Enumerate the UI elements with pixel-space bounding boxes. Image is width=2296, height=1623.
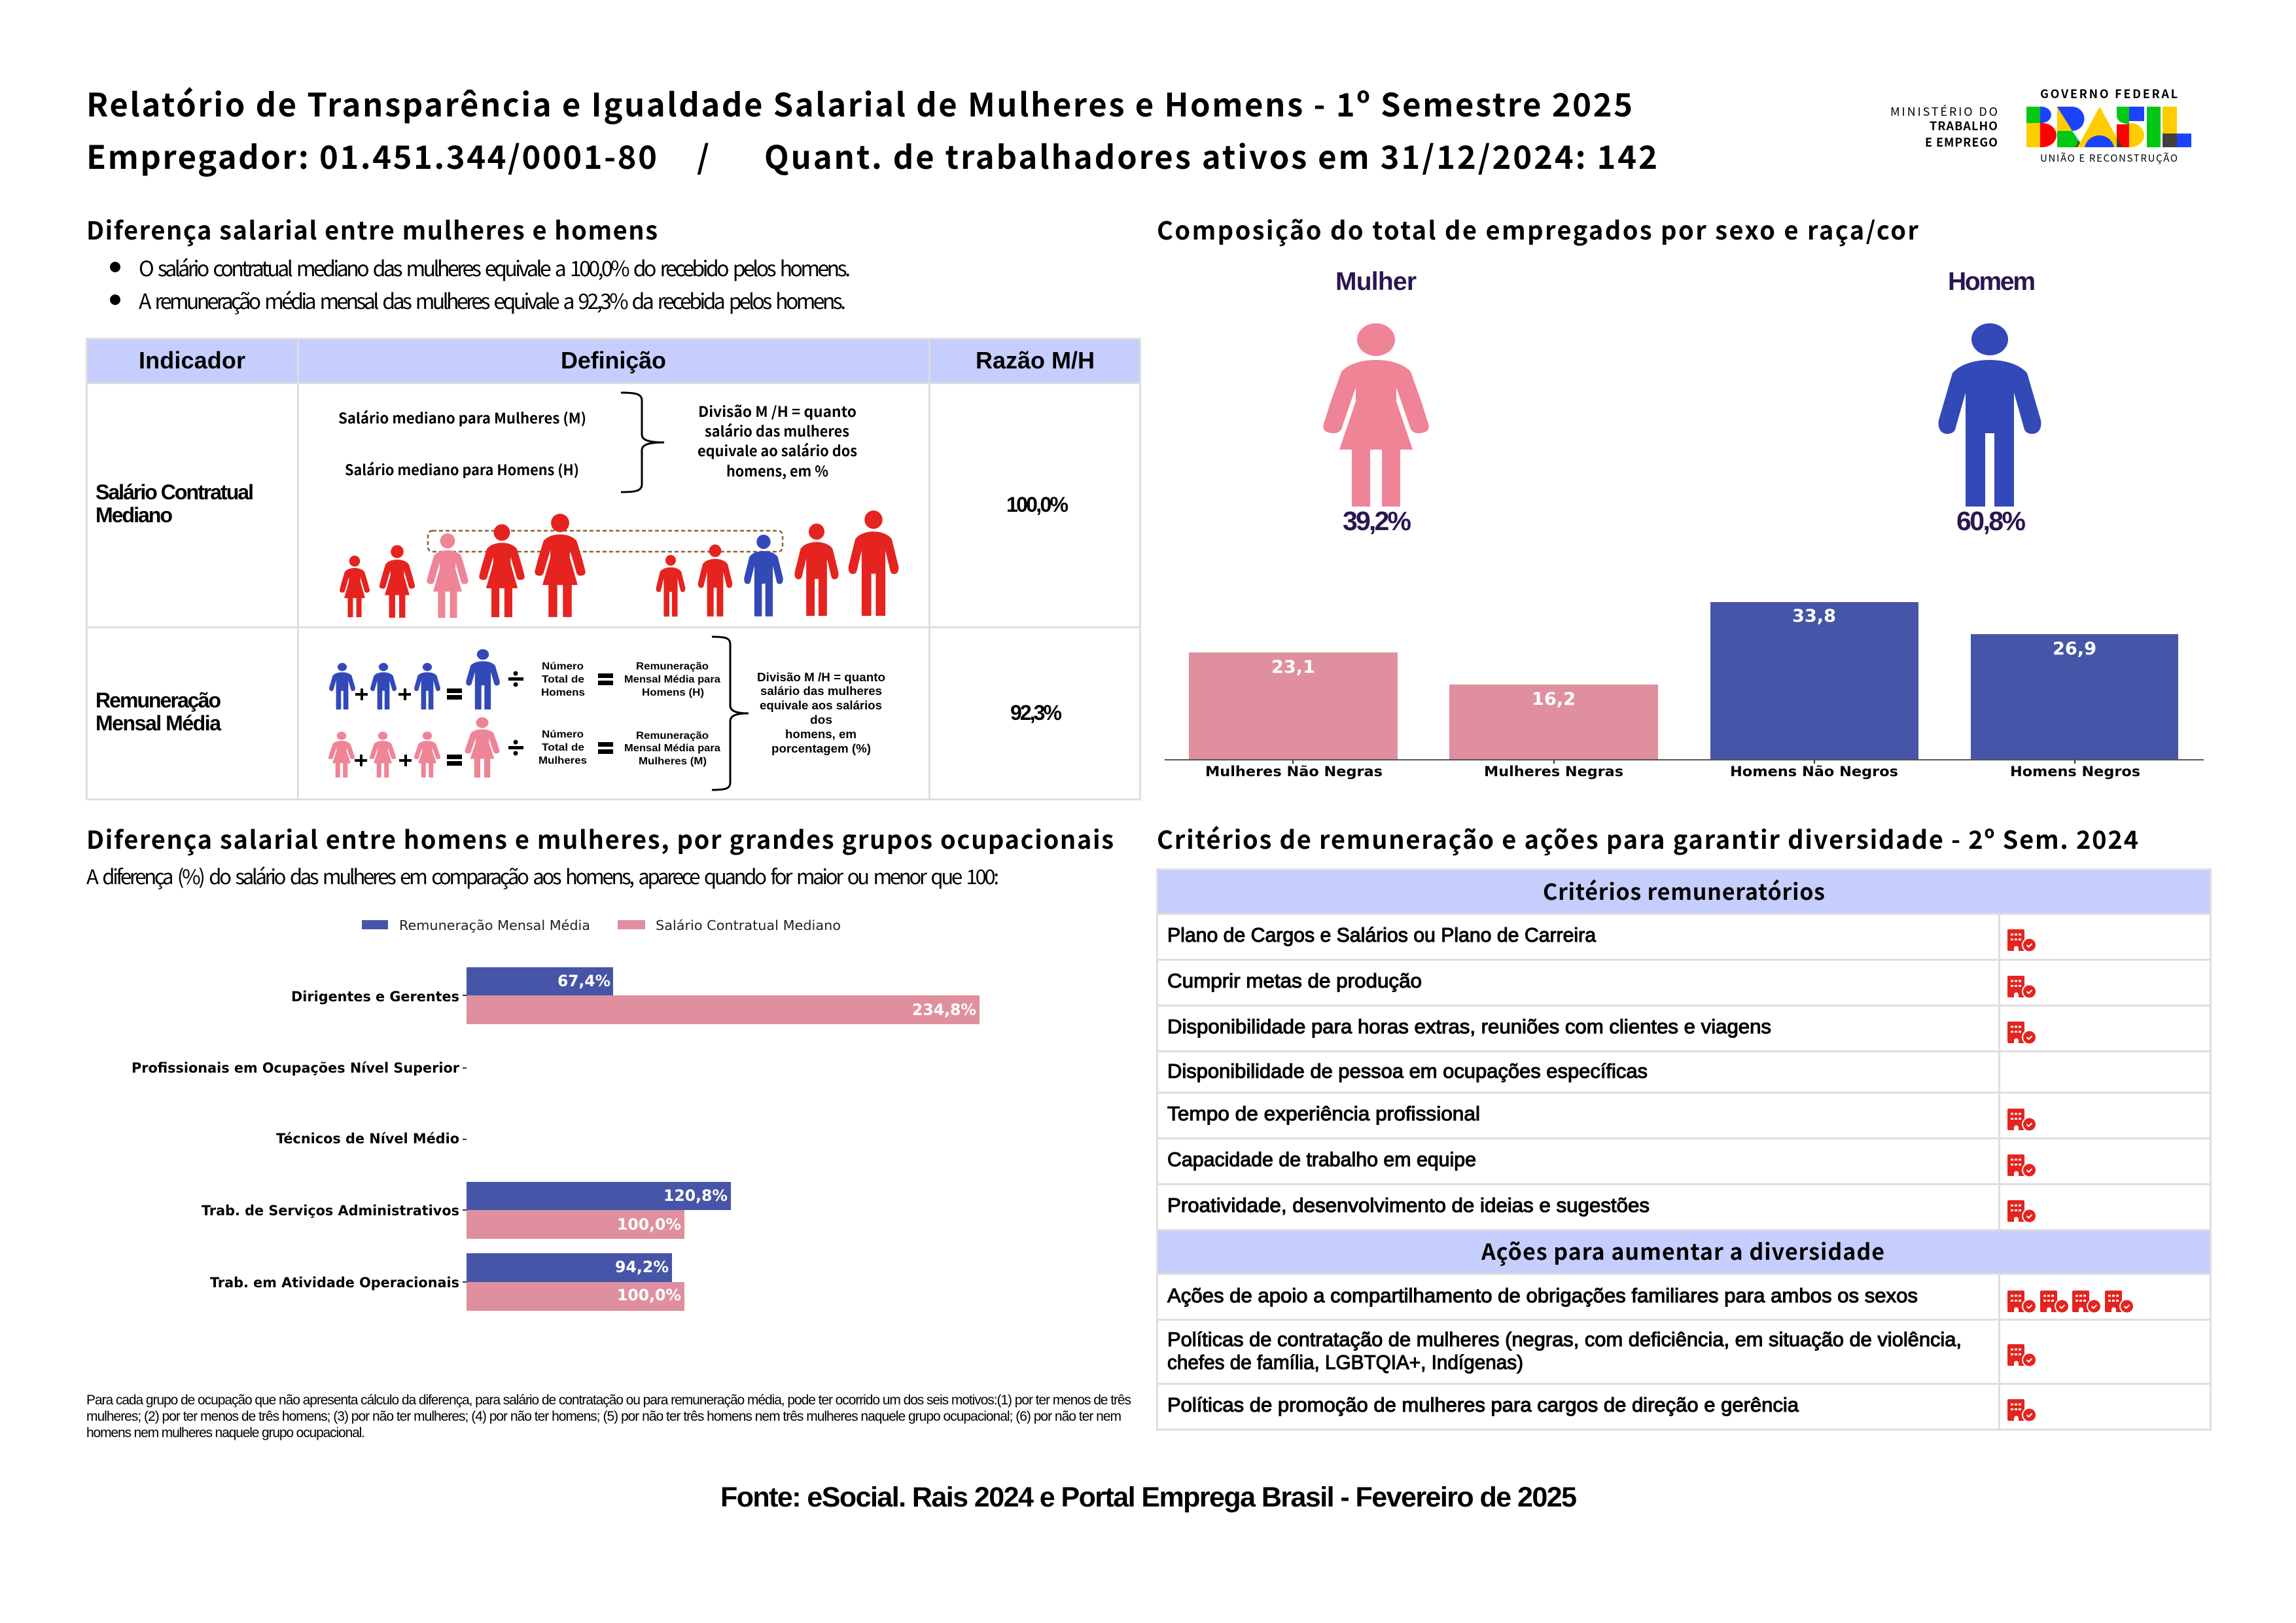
formula text: homens: Homens (541, 687, 585, 698)
formula text: salário mediano: Salário mediano para Mulheres (M) (338, 407, 586, 428)
formula text: mulheres: Remuneração (636, 730, 709, 741)
row text: critérios: Plano de Cargos e Salários ou Plano de Carreira (1167, 923, 1597, 946)
source footer: Fonte: eSocial. Rais 2024 e Portal Emprega Brasil - Fevereiro de 2025 (720, 1482, 1577, 1513)
bars: Trab. de Serviços Administrativos: 100,0% (617, 1215, 681, 1234)
bars: Trab. em Atividade Operacionais: 100,0% (617, 1286, 681, 1304)
category labels (1205, 764, 2140, 779)
explanation text: divisão M/H: salário das mulheres (760, 685, 882, 698)
formula text: mulheres: Mulheres (M) (639, 756, 707, 767)
bars: Dirigentes e Gerentes: 67,4% (557, 972, 610, 990)
explanation text: divisão M/H: equivale ao salário dos (698, 440, 857, 461)
row label: Remuneração Mensal Média (96, 688, 221, 735)
heading: diferença salarial: Diferença salarial entre mulheres e homens (86, 211, 658, 247)
row text: critérios: Tempo de experiência profissional (1167, 1102, 1480, 1125)
row text: ações: Ações de apoio a compartilhamento de obrigações familiares para ambos os sexos (1167, 1284, 1918, 1307)
row text: ações (1167, 1284, 1962, 1416)
logo: Ministério do Trabalho e Emprego: TRABALHO (1930, 117, 1998, 134)
category labels: Técnicos de Nível Médio (276, 1131, 459, 1147)
category labels: Dirigentes e Gerentes (291, 989, 459, 1005)
category labels: Homens Negros (2010, 764, 2140, 779)
explanation text: divisão M/H (757, 671, 885, 755)
title: / (697, 132, 709, 179)
formula text: mulheres: Total de (542, 742, 584, 753)
category labels: Trab. em Atividade Operacionais (210, 1275, 459, 1291)
header: Razão M/H: Razão M/H (976, 347, 1095, 374)
value: 100,0%: 100,0% (1006, 493, 1069, 516)
formula text: homens: Mensal Média para (624, 674, 720, 685)
formula text: homens (541, 661, 720, 698)
explanation text: divisão M/H: homens, em (785, 728, 857, 741)
heading: grupos ocupacionais: Diferença salarial entre homens e mulheres, por grandes grupos ocupacionais (86, 820, 1114, 856)
bullet text 1: O salário contratual mediano das mulheres equivale a 100,0% do recebido pelos homens. (139, 253, 851, 283)
category labels: Mulheres Negras (1484, 764, 1623, 779)
formula text: mulheres: Mulheres (539, 755, 587, 766)
formula text: homens: Remuneração (636, 661, 709, 672)
table: critérios e ações (1156, 868, 2212, 1431)
row label: Remuneração Mensal Média: Remuneração (96, 688, 221, 712)
row text: ações: chefes de família, LGBTQIA+, Indígenas) (1167, 1351, 1523, 1374)
label: Mulher: Mulher (1335, 268, 1417, 296)
operators (355, 671, 613, 766)
explanation text: divisão M/H (698, 401, 857, 481)
logo: Governo Federal Brasil: GOVERNO FEDERAL (2040, 85, 2178, 102)
legend (362, 918, 841, 933)
icons: men formula (329, 649, 500, 709)
category labels (132, 989, 460, 1291)
formula text: homens: Número (542, 661, 584, 672)
panel: composição (1157, 211, 2204, 779)
category labels: Trab. de Serviços Administrativos (202, 1203, 459, 1219)
header: ações para aumentar a diversidade: Ações para aumentar a diversidade (1481, 1234, 1884, 1266)
legend: Salário Contratual Mediano (656, 918, 841, 933)
subtitle: A diferença (%) do salário das mulheres em comparação aos homens, aparece quando for maior ou menor que 100: (86, 861, 999, 890)
footnote: Para cada grupo de ocupação que não apresenta cálculo da diferença, para salário de contratação ou para remuneração média, pode ter ocorrido um dos seis motivos:(1) por ter menos de três (86, 1393, 1131, 1408)
value: 92,3%: 92,3% (1010, 701, 1062, 724)
row label: Salário Contratual Mediano: Salário Contratual (96, 480, 254, 504)
value labels: 23,1 (1271, 657, 1315, 677)
row label: Salário Contratual Mediano (96, 480, 254, 527)
panel: diferença salarial (86, 211, 1141, 800)
icon: man (1939, 323, 2041, 507)
bars: Dirigentes e Gerentes (467, 967, 980, 1024)
formula text: salário mediano: Salário mediano para Homens (H) (345, 459, 579, 480)
heading: composição: Composição do total de empregados por sexo e raça/cor (1157, 211, 1918, 247)
bars: Trab. em Atividade Operacionais: 94,2% (615, 1258, 669, 1276)
heading: critérios: Critérios de remuneração e ações para garantir diversidade - 2º Sem. 2024 (1157, 820, 2138, 856)
logo: Governo Federal Brasil (2026, 85, 2191, 165)
panel: critérios (1156, 820, 2212, 1431)
explanation text: divisão M/H: homens, em % (726, 460, 828, 481)
bar chart: sexo e raça (1165, 602, 2204, 779)
category labels: Mulheres Não Negras (1205, 764, 1383, 779)
bracket (712, 637, 749, 790)
header: critérios remuneratórios: Critérios remuneratórios (1543, 874, 1825, 906)
explanation text: divisão M/H: equivale aos salários (760, 699, 882, 712)
category labels: Profissionais em Ocupações Nível Superior (132, 1060, 460, 1076)
header: Indicador: Indicador (139, 347, 245, 374)
explanation text: divisão M/H: salário das mulheres (705, 420, 849, 441)
explanation text: divisão M/H: Divisão M /H = quanto (698, 401, 857, 421)
label: Homem: Homem (1948, 268, 2036, 296)
value labels: 33,8 (1792, 606, 1836, 626)
icon: woman (1323, 323, 1429, 507)
bars: Trab. de Serviços Administrativos: 120,8% (663, 1186, 728, 1205)
footnote: homens nem mulheres naquele grupo ocupacional. (86, 1425, 365, 1440)
formula text: mulheres (539, 729, 720, 767)
row text: ações: Políticas de promoção de mulheres para cargos de direção e gerência (1167, 1393, 1799, 1416)
median highlight box (428, 531, 783, 552)
row text: critérios (1167, 923, 1771, 1217)
value labels (1271, 606, 2096, 709)
row label: Salário Contratual Mediano: Mediano (96, 503, 173, 527)
row text: critérios: Disponibilidade de pessoa em ocupações específicas (1167, 1060, 1648, 1082)
formula text: mulheres: Mensal Média para (624, 743, 720, 754)
value: 60,8%: 60,8% (1956, 506, 2026, 536)
formula text: salário mediano (338, 407, 586, 480)
explanation text: divisão M/H: porcentagem (%) (771, 742, 871, 755)
formula text: mulheres: Número (542, 729, 584, 740)
logo: Ministério do Trabalho e Emprego (1890, 103, 1998, 151)
row text: critérios: Proatividade, desenvolvimento de ideias e sugestões (1167, 1194, 1650, 1217)
bracket (621, 393, 664, 492)
bars: Trab. de Serviços Administrativos (467, 1182, 731, 1239)
table: indicadores (86, 338, 1141, 800)
logo: Ministério do Trabalho e Emprego: MINISTÉRIO DO (1890, 103, 1998, 120)
bars: Trab. em Atividade Operacionais (467, 1253, 684, 1311)
row text: critérios: Disponibilidade para horas extras, reuniões com clientes e viagens (1167, 1015, 1771, 1038)
explanation text: divisão M/H: Divisão M /H = quanto (757, 671, 885, 684)
value: 39,2%: 39,2% (1343, 506, 1411, 536)
category labels: Homens Não Negros (1730, 764, 1898, 779)
header: Definição: Definição (561, 347, 666, 374)
title: Relatório de Transparência e Igualdade Salarial de Mulheres e Homens - 1º Semestre 2025 (86, 80, 1633, 126)
logo: Ministério do Trabalho e Emprego: E EMPREGO (1925, 134, 1998, 151)
row text: critérios: Capacidade de trabalho em equipe (1167, 1148, 1476, 1171)
row text: ações: Políticas de contratação de mulheres (negras, com deficiência, em situação de violência, (1167, 1328, 1962, 1351)
bars: Dirigentes e Gerentes: 234,8% (912, 1001, 976, 1019)
icons: women by salary order (340, 514, 586, 618)
row text: critérios: Cumprir metas de produção (1167, 969, 1422, 992)
title (86, 80, 1657, 179)
legend: Remuneração Mensal Média (399, 918, 590, 933)
value labels: 26,9 (2053, 639, 2096, 659)
title: Quant. de trabalhadores ativos em 31/12/2024: 142 (764, 132, 1657, 179)
panel: grupos ocupacionais (86, 820, 1131, 1440)
bar chart: grupos (132, 967, 980, 1311)
explanation text: divisão M/H: dos (810, 713, 832, 726)
title: Empregador: 01.451.344/0001-80 (86, 132, 657, 179)
formula text: homens: Homens (H) (642, 687, 704, 698)
icons: women formula (328, 717, 500, 777)
icons: critérios (2007, 929, 2037, 1224)
footnote (86, 1393, 1131, 1440)
logo: Governo Federal Brasil: UNIÃO E RECONSTRUÇÃO (2040, 151, 2178, 165)
icons: men by salary order (656, 510, 898, 616)
icons: ações (2007, 1291, 2134, 1423)
value labels: 16,2 (1532, 689, 1576, 709)
bullet text 2: A remuneração média mensal das mulheres equivale a 92,3% da recebida pelos homens. (139, 285, 846, 315)
footnote: mulheres; (2) por ter menos de três homens; (3) por não ter mulheres; (4) por não ter homens; (5) por não ter três homens nem três mulheres naquele grupo ocupacional; (6) por não ter nem (86, 1409, 1122, 1424)
formula text: homens: Total de (542, 674, 584, 685)
row label: Remuneração Mensal Média: Mensal Média (96, 711, 221, 735)
